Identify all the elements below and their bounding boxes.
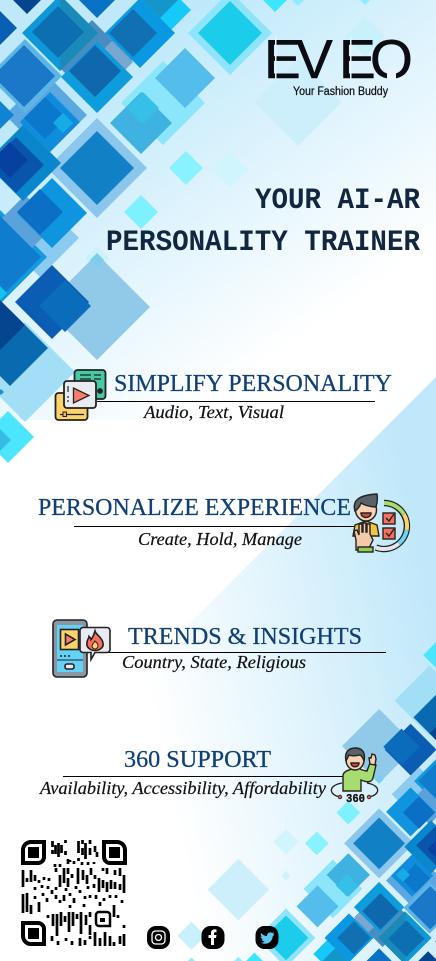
heading: SIMPLIFY PERSONALITY [114, 371, 392, 397]
section: trends and insights [53, 620, 386, 677]
title: YOUR AI-AR [255, 184, 420, 218]
logo wordmark: EVEO [264, 28, 413, 90]
icon: media cards [56, 370, 106, 420]
section: 360 support [39, 747, 378, 806]
icon: twitter [256, 926, 278, 949]
logo tagline: Your Fashion Buddy [293, 86, 388, 98]
section: personalize experience [38, 494, 407, 552]
icon: instagram [147, 926, 170, 949]
decorative diamonds: bottom right [178, 637, 436, 961]
subtitle: Availability, Accessibility, Affordability [39, 778, 326, 798]
decorative diamonds: top left [0, 0, 385, 463]
section: simplify personality [56, 370, 392, 422]
icon: person with checklist ring [353, 494, 407, 552]
360 label: 360 [346, 793, 365, 806]
logo [264, 28, 413, 98]
subtitle: Country, State, Religious [122, 652, 306, 672]
icon: person with 360 arrows [331, 748, 378, 806]
heading: TRENDS & INSIGHTS [128, 624, 362, 650]
subtitle: Create, Hold, Manage [138, 529, 302, 549]
title [106, 184, 420, 260]
QR data modules [23, 840, 124, 946]
heading: 360 SUPPORT [124, 747, 271, 773]
QR code [23, 840, 125, 946]
icon: facebook [202, 926, 224, 949]
finder patterns [23, 842, 125, 944]
social icons [147, 926, 278, 949]
subtitle: Audio, Text, Visual [143, 402, 284, 422]
heading: PERSONALIZE EXPERIENCE [38, 495, 351, 521]
icon: phone with trending flame [53, 620, 110, 677]
